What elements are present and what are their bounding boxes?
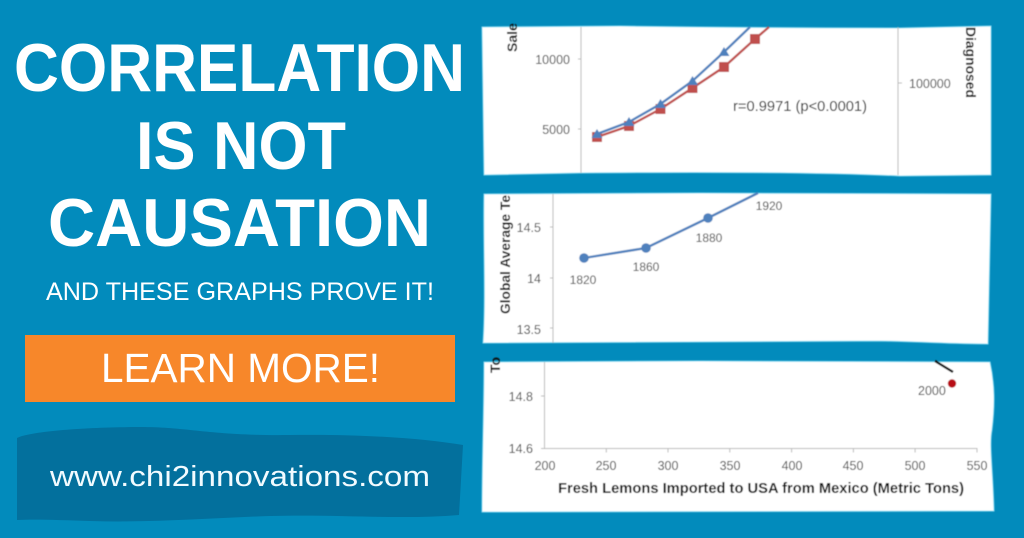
year labels: 1820 — [570, 273, 597, 287]
axes — [541, 362, 978, 452]
panel: sales vs diagnosed chart — [482, 23, 991, 176]
panel: lemons scatter chart: 300 — [658, 459, 678, 473]
axis labels — [517, 221, 541, 337]
panel: lemons scatter chart: 500 — [905, 459, 925, 473]
line series: red squares — [592, 27, 769, 142]
year labels: 1860 — [633, 260, 660, 274]
panel: lemons scatter chart: 250 — [596, 459, 616, 473]
panel: lemons scatter chart: 350 — [720, 459, 740, 473]
title: IS NOT — [136, 108, 346, 184]
correlation annotation: r=0.9971 (p<0.0001) — [733, 99, 867, 115]
data point 2000: 2000 — [918, 384, 946, 398]
button: learn more — [25, 335, 455, 402]
title: CAUSATION — [48, 185, 431, 261]
panel: global temperature chart: Global Average Te — [497, 195, 513, 314]
axis labels: 14 — [527, 272, 541, 286]
panel: sales vs diagnosed chart: Sale — [504, 23, 520, 52]
title: CORRELATION — [14, 30, 465, 106]
axis labels: 5000 — [542, 123, 570, 137]
axes — [578, 27, 902, 175]
panel: lemons scatter chart: 450 — [843, 459, 863, 473]
line series: blue triangles — [592, 27, 750, 138]
website banner: www.chi2innovations.com — [49, 461, 430, 493]
panel: lemons scatter chart: 200 — [535, 459, 555, 473]
data point 2000 — [918, 361, 956, 398]
button: learn more: LEARN MORE! — [101, 345, 380, 391]
year labels — [570, 199, 783, 287]
line series — [579, 193, 758, 263]
axis labels: 13.5 — [517, 323, 541, 337]
year labels: 1880 — [696, 231, 723, 245]
title — [14, 30, 465, 261]
panel: lemons scatter chart: To — [487, 357, 503, 373]
panel: lemons scatter chart — [482, 357, 994, 512]
year labels: 1920 — [756, 199, 783, 213]
axis labels: 14.6 — [509, 442, 533, 456]
website banner — [17, 427, 463, 521]
axis labels — [509, 390, 533, 456]
panel: lemons scatter chart: 550 — [967, 459, 987, 473]
panel: global temperature chart — [483, 193, 991, 344]
axis labels: 10000 — [535, 53, 570, 67]
panel: sales vs diagnosed chart: 100000 — [909, 77, 951, 91]
panel: sales vs diagnosed chart: Diagnosed — [963, 27, 979, 98]
axis labels: 14.5 — [517, 221, 541, 235]
subtitle: AND THESE GRAPHS PROVE IT! — [46, 278, 434, 306]
panel: lemons scatter chart: 400 — [782, 459, 802, 473]
x axis title: Fresh Lemons Imported to USA from Mexico (Metric Tons) — [558, 481, 964, 497]
axes — [550, 194, 553, 343]
axis labels — [535, 53, 570, 137]
axis labels: 14.8 — [509, 390, 533, 404]
